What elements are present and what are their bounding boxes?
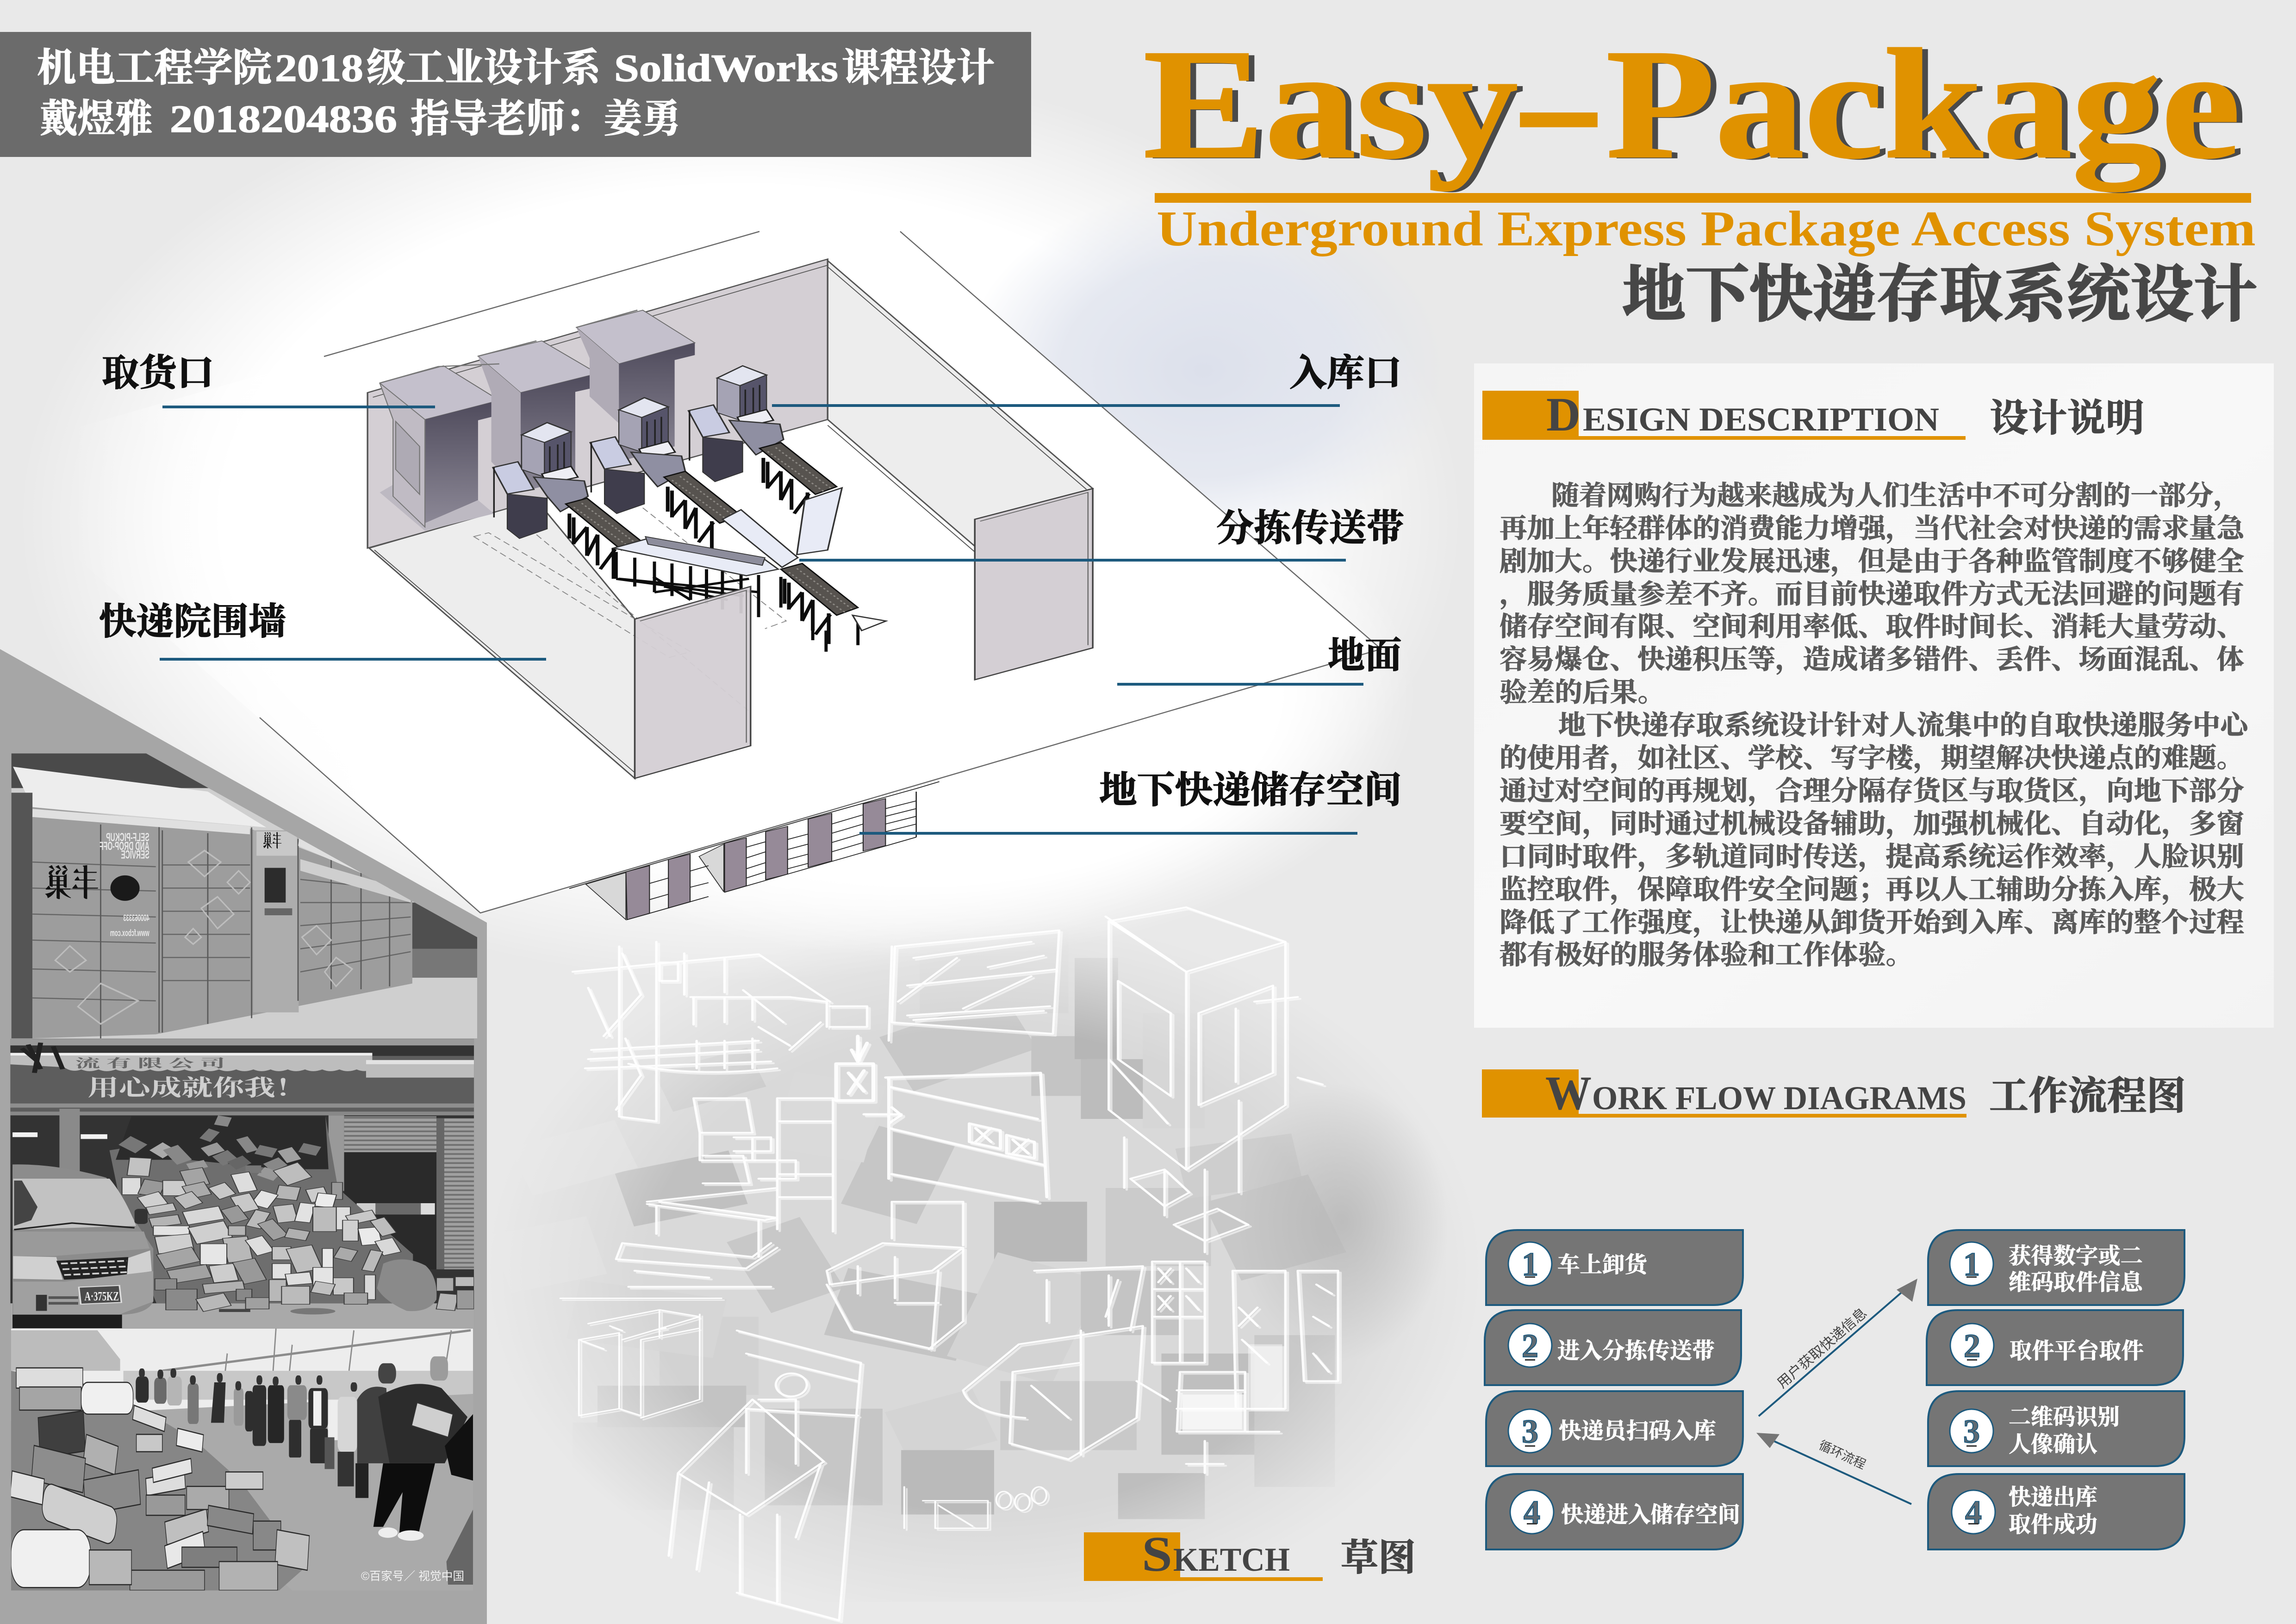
label: inbound port: 入库口 xyxy=(1289,353,1402,394)
workflow right: step 4: 4 xyxy=(1965,1494,1982,1531)
mirrored locker lettering: www.fcbox.com xyxy=(110,928,149,938)
section heading: sketch xyxy=(1084,1527,1416,1582)
workflow right: step 2: 取件平台取件 xyxy=(2010,1339,2144,1363)
section heading: work flow xyxy=(1482,1067,2186,1120)
description text: 验差的后果。 xyxy=(1500,677,1665,707)
sketch lines, first pass xyxy=(560,907,1338,1620)
conveyor belts xyxy=(566,498,643,579)
header band: 戴煜雅 xyxy=(40,98,153,141)
arrow: user obtains express info xyxy=(1759,1279,1917,1416)
english subtitle: Underground Express Package Access System xyxy=(1157,201,2256,256)
header band: SolidWorks xyxy=(614,47,838,90)
arrow: user obtains express info: 用户获取快递信息 xyxy=(1774,1305,1870,1391)
section heading: sketch: 草图 xyxy=(1341,1538,1416,1579)
workflow left: step 4: 快递进入储存空间 xyxy=(1561,1503,1740,1527)
workflow right: step 3: 3 xyxy=(1963,1413,1980,1450)
description text: 都有极好的服务体验和工作体验。 xyxy=(1500,940,1913,970)
description text: 监控取件，保障取件安全问题；再以人工辅助分拣入库，极大 xyxy=(1500,874,2244,905)
description text: 降低了工作强度，让快递从卸货开始到入库、离库的整个过程 xyxy=(1500,907,2244,938)
workflow right: step 2: 2 xyxy=(1964,1327,1980,1364)
3D isometric room model xyxy=(367,259,1093,778)
section heading: sketch: S xyxy=(1142,1527,1172,1582)
mirrored locker lettering: SERVICE xyxy=(121,849,149,862)
floor markings xyxy=(474,508,786,711)
workflow right: step 3 xyxy=(1928,1391,2184,1466)
workflow left: step 3 xyxy=(1486,1391,1743,1466)
mirrored locker lettering: AND DROP-OFF xyxy=(100,840,149,853)
heading: design description: D xyxy=(1546,388,1580,441)
heading: design description xyxy=(1482,388,2144,441)
panel: design description xyxy=(1474,363,2274,1028)
workflow left: step 3: 快递员扫码入库 xyxy=(1559,1419,1716,1443)
left side wall xyxy=(369,500,635,778)
description text: 储存空间有限、空间利用率低、取件时间长、消耗大量劳动、 xyxy=(1500,612,2244,642)
main title: Easy-Package: Package xyxy=(1612,18,2247,195)
workflow right: step 4 xyxy=(1928,1474,2184,1549)
workflow right: step 1: 维码取件信息 xyxy=(2009,1270,2144,1295)
workflow left: step 1: 1 xyxy=(1522,1246,1538,1283)
van xyxy=(12,1164,153,1328)
header band: 课程设计 xyxy=(842,47,995,90)
description text xyxy=(1500,481,2251,970)
plastic sacks xyxy=(377,1259,436,1311)
workflow right: step 2 xyxy=(1927,1310,2183,1385)
header band xyxy=(0,32,1031,157)
chinese title: 地下快递存取系统设计 xyxy=(1622,261,2257,329)
front left wall panel xyxy=(635,587,751,778)
label: pickup port xyxy=(102,353,435,408)
section heading: work flow: ORK FLOW DIAGRAMS xyxy=(1592,1080,1966,1117)
workflow left: step 2 xyxy=(1485,1310,1741,1385)
label: ground: 地面 xyxy=(1328,636,1402,676)
description text: 要空间，同时通过机械设备辅助，加强机械化、自动化，多窗 xyxy=(1500,809,2244,839)
photo: parcel locker: 丰巢 xyxy=(44,864,99,904)
queue of people xyxy=(136,1356,473,1585)
workflow left: step 4: 4 xyxy=(1524,1494,1540,1531)
lighter parcel pile xyxy=(122,1157,474,1312)
workflow right: step 1: 1 xyxy=(1963,1246,1980,1283)
hand-drawn sketches overlay xyxy=(560,907,1340,1622)
underground storage block xyxy=(569,781,940,920)
header band: 级工业设计系 xyxy=(367,47,601,90)
right side wall xyxy=(828,261,1093,546)
heading: design description: ESIGN DESCRIPTION xyxy=(1583,401,1939,438)
label: inbound port xyxy=(772,353,1402,407)
main title: Easy-Package: - xyxy=(1511,17,1607,191)
workflow left: step 2: 进入分拣传送带 xyxy=(1557,1339,1715,1363)
label: sorting conveyor xyxy=(799,508,1404,562)
header band: 指导老师：姜勇 xyxy=(411,98,681,141)
main title: Easy-Package: Easy xyxy=(1150,18,1524,193)
header band: 2018 xyxy=(275,47,363,90)
heading: design description: 设计说明 xyxy=(1990,397,2144,439)
label: courtyard wall xyxy=(99,602,546,661)
header band: 机电工程学院 xyxy=(37,47,272,90)
label: pickup port: 取货口 xyxy=(102,353,214,394)
photo watermark: ©百家号／ 视觉中国 xyxy=(361,1570,464,1583)
workflow left: step 4 xyxy=(1486,1474,1743,1549)
photo: parcel locker xyxy=(12,753,477,1038)
mirrored locker lettering: SELF-PICKUP xyxy=(106,831,149,844)
sorter chutes xyxy=(614,538,778,576)
back parcels, dark xyxy=(110,1115,413,1303)
main title: Easy-Package: Package xyxy=(1606,17,2240,194)
label: sorting conveyor: 分拣传送带 xyxy=(1216,508,1404,549)
workflow right: step 3: 人像确认 xyxy=(2009,1432,2097,1457)
sketch lines, second offset pass xyxy=(563,909,1340,1622)
workflow left: step 2: 2 xyxy=(1522,1327,1538,1364)
workflow right: step 3: 二维码识别 xyxy=(2009,1405,2120,1430)
heap of parcels xyxy=(11,1371,305,1591)
description text: 随着网购行为越来越成为人们生活中不可分割的一部分， xyxy=(1551,481,2241,511)
workflow right: step 1 xyxy=(1928,1230,2184,1305)
workflow right: step 4: 取件成功 xyxy=(2009,1512,2097,1537)
mirrored locker lettering xyxy=(100,831,149,938)
photo: parcel locker: 丰巢 xyxy=(263,831,282,851)
label: underground storage: 地下快递储存空间 xyxy=(1099,770,1402,811)
workflow right: step 1: 获得数字或二 xyxy=(2009,1244,2143,1268)
storage pillars xyxy=(380,310,695,531)
photo: people queueing by parcels xyxy=(10,1329,473,1591)
workflow left: step 1: 车上卸货 xyxy=(1557,1253,1650,1277)
sketch section background: pile of parcels xyxy=(487,917,1482,1624)
label: ground xyxy=(1117,636,1402,686)
description text: 容易爆仓、快递积压等，造成诸多错件、丢件、场面混乱、体 xyxy=(1500,644,2244,675)
slogan on shop sign: 用心成就你我！ xyxy=(87,1075,306,1100)
description text: 口同时取件，多轨道同时传送，提高系统运作效率，人脸识别 xyxy=(1500,842,2244,872)
main title: Easy-Package xyxy=(1143,17,2247,195)
section heading: work flow: W xyxy=(1545,1067,1592,1120)
arrow: loop flow xyxy=(1756,1433,1911,1504)
workflow left: step 3: 3 xyxy=(1522,1413,1538,1450)
label: underground storage xyxy=(859,770,1402,835)
section heading: sketch: KETCH xyxy=(1173,1541,1290,1578)
description text: 再加上年轻群体的消费能力增强，当代社会对快递的需求量急 xyxy=(1500,513,2246,544)
label: courtyard wall: 快递院围墙 xyxy=(99,602,286,643)
workflow left: step 1 xyxy=(1486,1230,1743,1305)
white glow behind model xyxy=(19,56,1462,981)
photo: express station with parcels and van xyxy=(10,1039,474,1328)
title rule xyxy=(1155,193,2251,203)
back wall xyxy=(367,259,828,548)
main title: Easy-Package: Easy xyxy=(1143,17,1518,191)
sorter frame xyxy=(616,552,858,652)
mirrored locker lettering: 400063333 xyxy=(124,913,149,923)
section heading: work flow: 工作流程图 xyxy=(1989,1075,2186,1118)
grey left corner band xyxy=(0,649,487,1624)
header band: 2018204836 xyxy=(170,98,397,141)
front right wall panel xyxy=(975,488,1093,680)
van: A·375KZ xyxy=(85,1289,119,1303)
description text: 剧加大。快递行业发展迅速，但是由于各种监管制度不够健全 xyxy=(1500,546,2244,577)
kiosks xyxy=(493,423,588,538)
workflow right: step 4: 快递出库 xyxy=(2009,1485,2097,1510)
description text: 地下快递存取系统设计针对人流集中的自取快递服务中心 xyxy=(1558,710,2251,740)
description text: 的使用者，如社区、学校、写字楼，期望解决快递点的难题。 xyxy=(1500,743,2244,774)
description text: ，服务质量参差不齐。而目前快递取件方式无法回避的问题有 xyxy=(1500,579,2244,610)
arrow: loop flow: 循环流程 xyxy=(1817,1438,1868,1472)
description text: 通过对空间的再规划，合理分隔存货区与取货区，向地下部分 xyxy=(1500,776,2244,806)
floor slab of 3D model xyxy=(0,201,1381,913)
photo: express station with parcels and van: 流 有 限 公 司 xyxy=(75,1057,225,1070)
